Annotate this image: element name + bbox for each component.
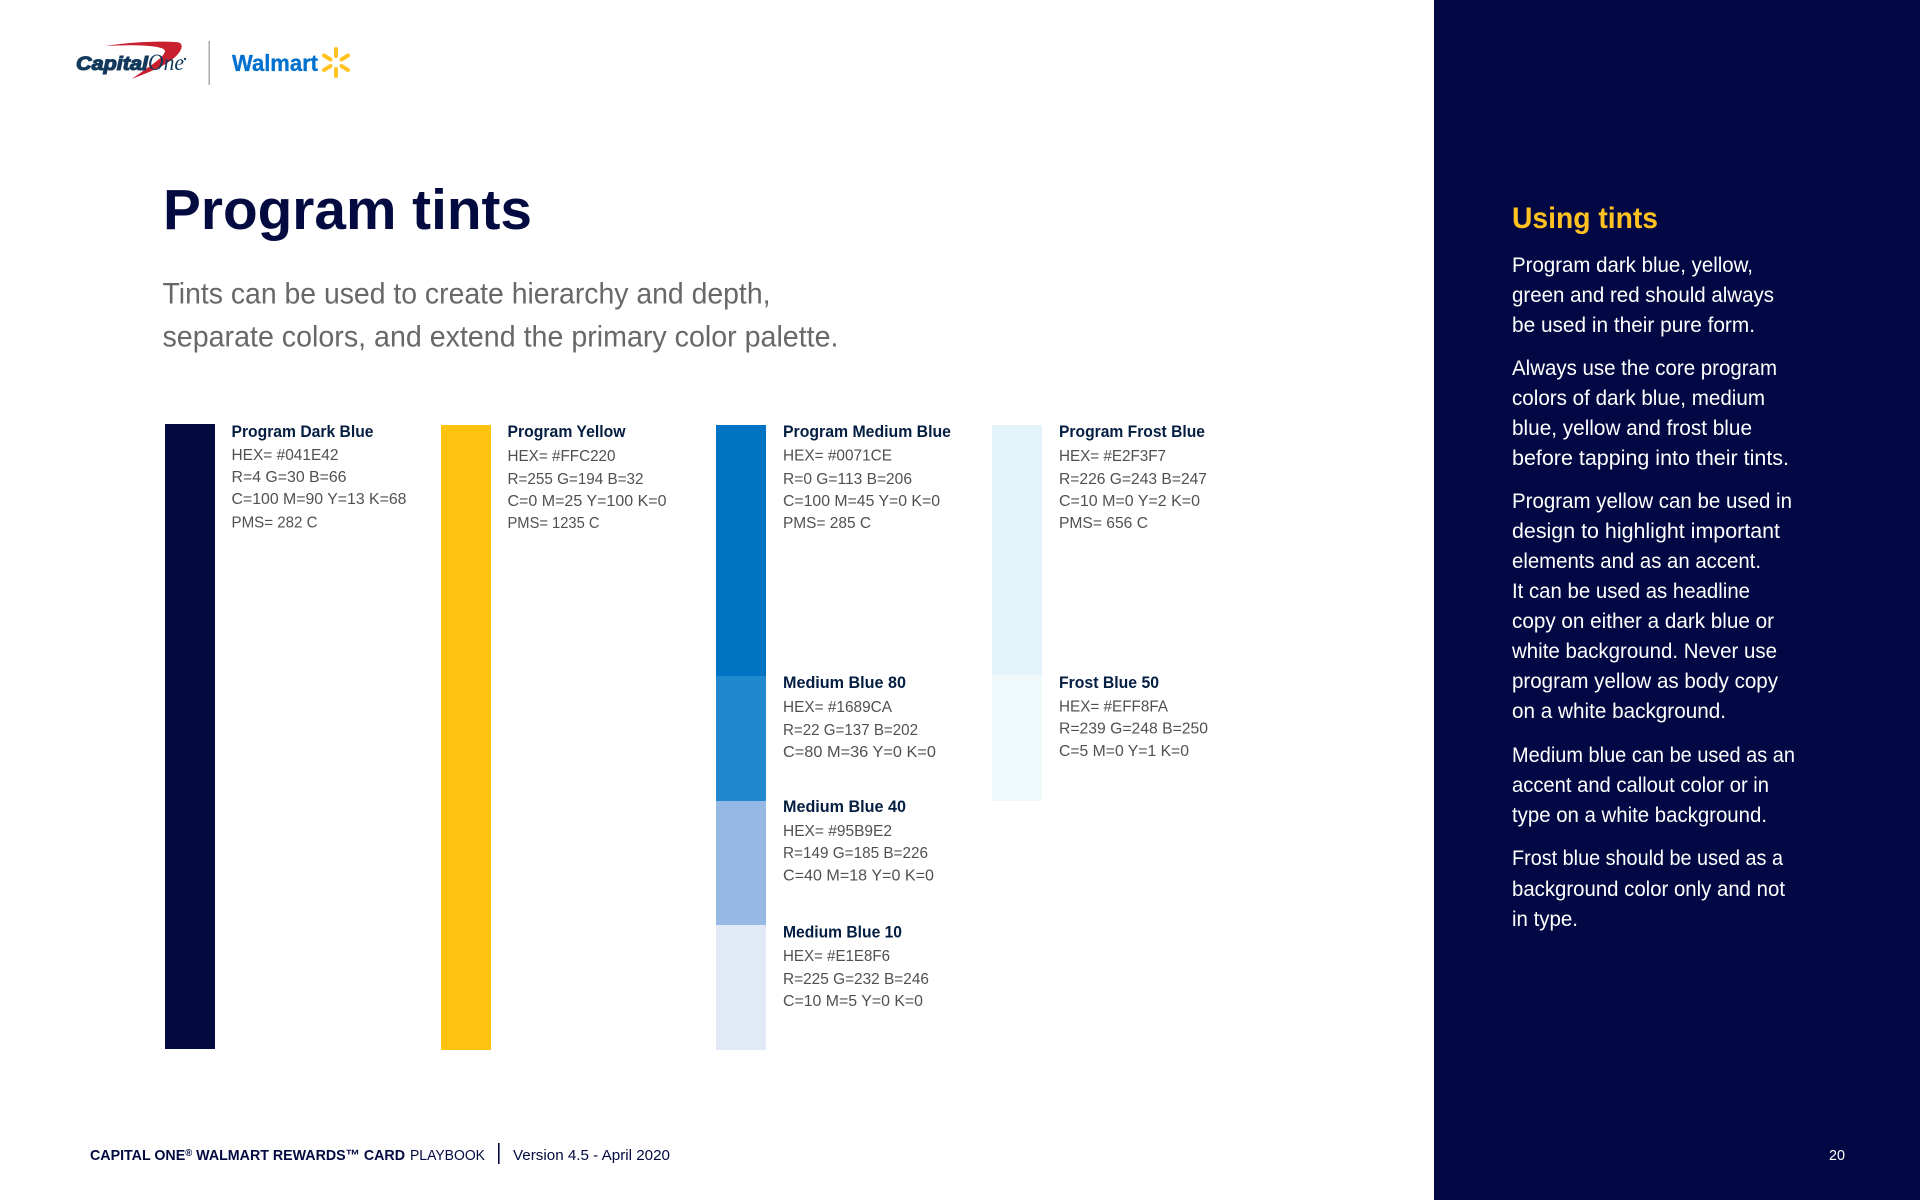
paragraph: pure form: green and red should always <box>1512 284 1774 307</box>
swatch: Program Dark Blue <box>165 423 406 1049</box>
color specs: frost blue 50: R=239 G=248 B=250 <box>1059 720 1208 738</box>
color specs: medium blue 80: Medium Blue 80 <box>783 674 906 692</box>
paragraph: frost blue: Frost blue should be used as a <box>1512 847 1783 870</box>
paragraph: core colors: Always use the core program <box>1512 357 1777 380</box>
paragraph: program yellow: on a white background. <box>1512 700 1726 723</box>
color bar: dark blue <box>165 424 215 1049</box>
color specs: medium blue: PMS= 285 C <box>783 515 871 532</box>
color specs: medium blue <box>783 423 951 532</box>
color bar: medium blue 40 <box>716 801 766 925</box>
color specs: frost blue: Program Frost Blue <box>1059 423 1205 441</box>
subtitle: separate colors, and extend the primary color palette. <box>162 320 838 354</box>
color bar: frost blue 50 <box>992 675 1042 801</box>
footer playbook title <box>90 1147 485 1164</box>
color bar: medium blue <box>716 425 766 676</box>
subtitle <box>162 278 838 354</box>
color specs: yellow: Program Yellow <box>508 423 626 441</box>
paragraph: program yellow: Program yellow can be used in <box>1512 490 1792 513</box>
swatch: Medium Blue 80 <box>716 674 936 801</box>
color specs: frost blue <box>1059 423 1207 532</box>
color specs: yellow: R=255 G=194 B=32 <box>508 471 644 488</box>
swatch: Program Frost Blue <box>992 423 1207 675</box>
footer playbook title: WALMART REWARDS™ CARD <box>192 1147 405 1164</box>
color specs: dark blue <box>232 423 406 532</box>
paragraph: medium blue: accent and callout color or in <box>1512 774 1769 797</box>
color specs: dark blue: HEX= #041E42 <box>232 447 338 464</box>
color specs: medium blue: C=100 M=45 Y=0 K=0 <box>783 493 940 510</box>
swatch: Medium Blue 40 <box>716 798 934 925</box>
color specs: frost blue 50: Frost Blue 50 <box>1059 674 1159 692</box>
paragraph: pure form: Program dark blue, yellow, <box>1512 254 1753 277</box>
color specs: yellow <box>508 423 667 532</box>
paragraph: medium blue <box>1512 744 1795 827</box>
logo: Capital One: One <box>148 50 184 75</box>
paragraph: program yellow <box>1511 490 1792 723</box>
color specs: medium blue 40: C=40 M=18 Y=0 K=0 <box>783 868 934 884</box>
paragraph: pure form <box>1512 254 1774 337</box>
color specs: frost blue 50: HEX= #EFF8FA <box>1059 698 1169 716</box>
color bar: medium blue 10 <box>716 925 766 1050</box>
color specs: dark blue: Program Dark Blue <box>232 423 374 441</box>
color specs: medium blue 10: R=225 G=232 B=246 <box>783 971 929 988</box>
color specs: medium blue 40 <box>783 798 934 884</box>
color specs: medium blue 10: C=10 M=5 Y=0 K=0 <box>783 993 923 1010</box>
color specs: frost blue: PMS= 656 C <box>1059 515 1148 532</box>
footer divider <box>498 1143 500 1164</box>
color specs: frost blue: C=10 M=0 Y=2 K=0 <box>1059 493 1200 510</box>
color specs: frost blue: R=226 G=243 B=247 <box>1059 471 1207 488</box>
logo lockup: Capital One and Walmart <box>76 41 348 85</box>
footer playbook title: PLAYBOOK <box>410 1147 485 1164</box>
title: Program tints <box>163 178 532 242</box>
paragraph: pure form: be used in their pure form. <box>1512 314 1755 337</box>
color specs: frost blue 50 <box>1059 674 1208 760</box>
swatch: Program Yellow <box>441 423 667 1050</box>
paragraph: core colors <box>1512 357 1789 470</box>
color specs: medium blue 10: Medium Blue 10 <box>783 924 902 942</box>
paragraph: frost blue: in type. <box>1512 908 1578 931</box>
paragraph: medium blue: Medium blue can be used as an <box>1512 744 1795 767</box>
paragraph: program yellow: program yellow as body copy <box>1512 670 1778 693</box>
color specs: medium blue 80: C=80 M=36 Y=0 K=0 <box>783 744 936 761</box>
color specs: yellow: HEX= #FFC220 <box>508 448 616 465</box>
paragraph: program yellow: It can be used as headline <box>1512 580 1750 603</box>
swatch: Medium Blue 10 <box>716 924 929 1050</box>
color specs: dark blue: PMS= 282 C <box>232 514 318 532</box>
color specs: medium blue 80 <box>783 674 936 761</box>
color specs: medium blue 40: Medium Blue 40 <box>783 798 906 816</box>
logo: Capital One <box>76 42 186 79</box>
logo: Walmart: Walmart <box>232 50 318 76</box>
color specs: medium blue 10: HEX= #E1E8F6 <box>783 948 890 965</box>
color specs: medium blue: Program Medium Blue <box>783 423 951 441</box>
color bar: yellow <box>441 425 491 1050</box>
paragraph: program yellow: elements and as an accent. <box>1512 550 1761 573</box>
color specs: yellow: C=0 M=25 Y=100 K=0 <box>508 493 667 510</box>
subtitle: Tints can be used to create hierarchy and depth, <box>162 278 770 310</box>
color specs: medium blue 40: HEX= #95B9E2 <box>783 823 892 840</box>
paragraph: core colors: before tapping into their tints. <box>1512 447 1789 470</box>
footer <box>90 1143 670 1164</box>
paragraph: frost blue: background color only and not <box>1512 878 1785 901</box>
paragraph: core colors: colors of dark blue, medium <box>1512 387 1765 410</box>
color bar: medium blue 80 <box>716 676 766 801</box>
paragraph: program yellow: design to highlight important <box>1512 520 1780 543</box>
sidebar heading: Using tints <box>1512 202 1658 235</box>
color bar: frost blue <box>992 425 1042 675</box>
color specs: yellow: PMS= 1235 C <box>508 515 600 532</box>
panel: using tints sidebar <box>1434 0 1920 1200</box>
paragraph: program yellow: copy on either a dark blue or <box>1512 610 1774 633</box>
swatch: Frost Blue 50 <box>992 674 1208 801</box>
color specs: medium blue 80: HEX= #1689CA <box>783 699 893 716</box>
footer playbook title: ® <box>185 1148 193 1159</box>
color specs: dark blue: R=4 G=30 B=66 <box>232 469 346 486</box>
color specs: medium blue: R=0 G=113 B=206 <box>783 471 912 488</box>
logo: Capital One: Capital <box>76 54 149 75</box>
swatch: Program Medium Blue <box>716 423 951 676</box>
paragraph: core colors: blue, yellow and frost blue <box>1512 417 1752 440</box>
color specs: medium blue 80: R=22 G=137 B=202 <box>783 722 918 739</box>
logo divider <box>208 41 210 85</box>
paragraph: medium blue: type on a white background. <box>1512 804 1767 827</box>
footer version: Version 4.5 - April 2020 <box>513 1147 670 1164</box>
color specs: medium blue 40: R=149 G=185 B=226 <box>783 845 928 862</box>
color specs: dark blue: C=100 M=90 Y=13 K=68 <box>232 491 406 508</box>
footer playbook title: CAPITAL ONE <box>90 1147 190 1164</box>
color specs: medium blue 10 <box>783 924 929 1010</box>
color specs: frost blue: HEX= #E2F3F7 <box>1059 448 1166 465</box>
color specs: frost blue 50: C=5 M=0 Y=1 K=0 <box>1059 743 1189 760</box>
color specs: medium blue: HEX= #0071CE <box>783 448 892 464</box>
paragraph: program yellow: white background. Never use <box>1511 640 1777 663</box>
paragraph: frost blue <box>1512 847 1785 931</box>
page number: 20 <box>1829 1147 1845 1164</box>
